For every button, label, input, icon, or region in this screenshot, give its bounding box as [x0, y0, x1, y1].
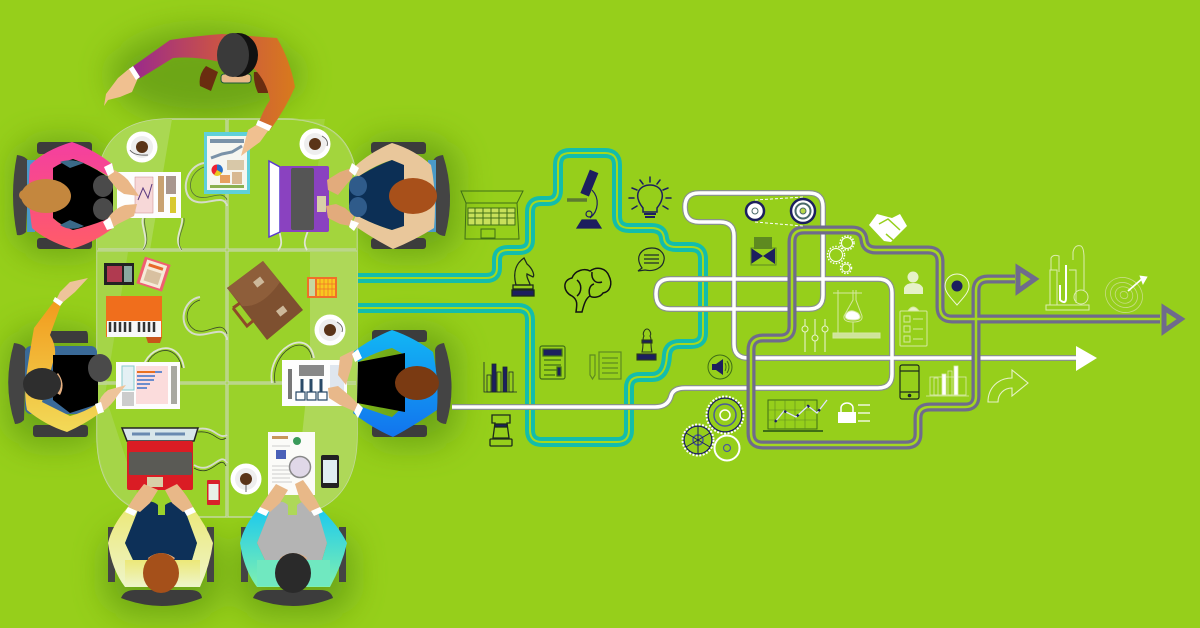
coffee cup [300, 128, 330, 160]
icon: white gears [828, 236, 854, 274]
icon: chemistry apparatus [1046, 246, 1089, 310]
person: right, tan [326, 142, 450, 249]
icon: brain [565, 268, 611, 312]
coffee cup [126, 132, 158, 162]
head [394, 186, 404, 205]
icon: white person [904, 272, 923, 294]
coffee cup [314, 314, 346, 346]
red phone [207, 480, 220, 505]
head [60, 187, 70, 205]
icon: handshake [869, 214, 907, 242]
glasses [221, 74, 251, 83]
icon: bar chart [484, 362, 517, 392]
icon: line chart laptop [763, 400, 827, 431]
barcode paper [282, 360, 347, 406]
head [55, 373, 63, 395]
icon: speech bubble [638, 248, 664, 271]
person: top, pointing [104, 33, 295, 156]
grey path and arrows [751, 230, 1181, 445]
icon: microscope [567, 170, 601, 228]
icon: rook chess piece [490, 415, 512, 446]
meeting table [97, 119, 357, 517]
person: left, yellow [8, 278, 126, 437]
head [148, 553, 175, 562]
left cuff and hand [104, 68, 138, 106]
hands [108, 168, 139, 228]
icon: gear cluster [682, 396, 744, 460]
piano keyboard [106, 296, 162, 343]
white path and arrow [452, 193, 1097, 407]
hands [56, 278, 126, 412]
icon: target with arrow [1099, 271, 1149, 319]
icon: speaker [708, 355, 732, 379]
head [398, 374, 408, 393]
right cuff and hand [241, 124, 270, 156]
brown briefcase [227, 261, 303, 340]
icon: curved arrow [988, 370, 1028, 402]
coffee cup [230, 464, 262, 494]
hands [326, 167, 354, 226]
icon: envelope [751, 237, 776, 265]
icon: pulleys with belt [746, 197, 815, 226]
icon: clipboard checklist [900, 307, 927, 346]
icon: laboratory flask [833, 290, 880, 338]
person: bottom right, mint [240, 480, 347, 606]
person: bottom left, cream [108, 484, 214, 606]
black calculator [104, 263, 134, 285]
report with magnifier [268, 432, 315, 495]
icon: laptop outline [461, 191, 523, 239]
icon: knight chess piece [512, 258, 534, 296]
chart paper: pink person [117, 172, 181, 218]
shirt and sleeves [132, 34, 295, 130]
clipboard report [204, 132, 250, 194]
red notebook [136, 257, 171, 292]
shadows under people [8, 30, 458, 615]
icon: light bulb [629, 177, 671, 217]
icon: pencil and notepad [590, 352, 621, 379]
purple laptop [269, 161, 329, 237]
person: left, pink [13, 142, 139, 249]
orange calculator [307, 277, 337, 298]
red laptop [122, 428, 198, 490]
icon: white bars [926, 366, 969, 396]
icon: sliders [802, 319, 828, 352]
black phone [321, 455, 339, 488]
icon: smartphone [900, 365, 919, 399]
head [218, 33, 258, 77]
icon: map pin [945, 274, 969, 305]
teal path [358, 153, 703, 442]
shoes [200, 66, 268, 93]
chart paper: yellow person [116, 362, 180, 409]
icon: bishop chess piece [637, 329, 656, 360]
head [280, 553, 307, 562]
icon: calculator [540, 346, 565, 379]
person: right, blue [328, 330, 452, 437]
icon: padlock with lines [838, 403, 870, 423]
